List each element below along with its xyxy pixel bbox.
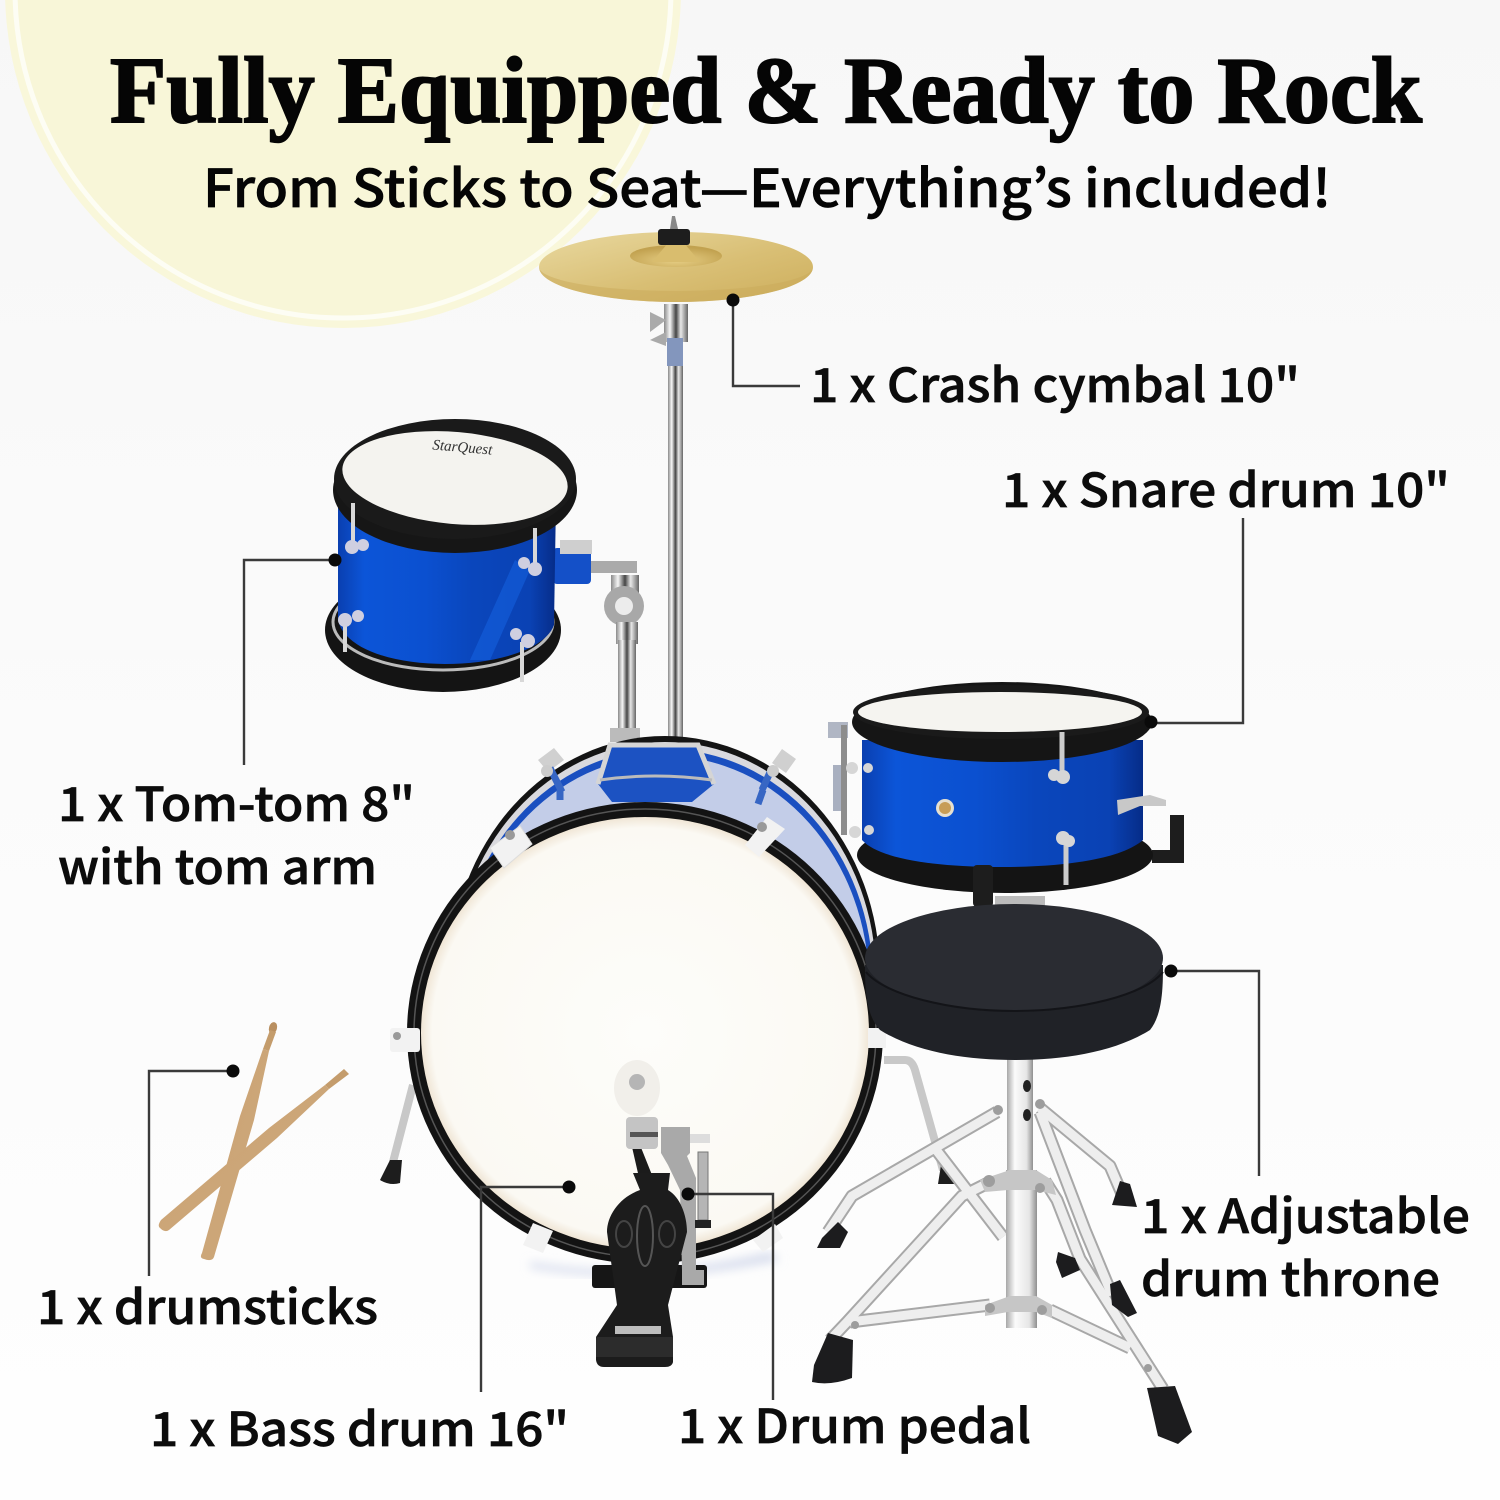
tom-tom (325, 419, 577, 692)
title: Fully Equipped & Ready to Rock (110, 39, 1423, 143)
callout: snare drum: 1 x Snare drum 10" (1002, 452, 1450, 521)
tom-tom: StarQuest (432, 437, 494, 459)
throne center post (851, 1058, 1152, 1372)
callout: drumsticks (37, 1064, 378, 1338)
callout: snare drum (1002, 452, 1450, 728)
tom arm (553, 540, 644, 742)
bass drum shell (450, 736, 880, 1214)
bass drum legs (380, 1060, 954, 1184)
crash cymbal (539, 216, 813, 302)
bass drum shadow (530, 1252, 780, 1276)
drumsticks (159, 1021, 349, 1260)
callout: drum throne: 1 x Adjustable (1141, 1178, 1470, 1247)
snare drum (828, 682, 1184, 907)
drum kit photo illustration (159, 216, 1192, 1444)
callout: bass drum: 1 x Bass drum 16" (150, 1391, 569, 1460)
callout: bass drum (150, 1180, 576, 1460)
drum pedal (592, 1060, 711, 1367)
throne legs (828, 1108, 1163, 1389)
callout: drumsticks: 1 x drumsticks (37, 1269, 378, 1338)
callout: tom-tom: 1 x Tom-tom 8" (58, 766, 415, 835)
cymbal stand (650, 304, 688, 752)
throne seat (865, 904, 1163, 1060)
callout: tom-tom (58, 554, 415, 898)
callout: drum throne: drum throne (1141, 1241, 1440, 1310)
throne feet (812, 1181, 1192, 1444)
callout: crash cymbal (726, 294, 1300, 416)
callout: drum pedal: 1 x Drum pedal (678, 1388, 1031, 1457)
callout: tom-tom: with tom arm (58, 829, 377, 898)
callout: drum throne (1141, 964, 1470, 1310)
bass drum head (390, 802, 886, 1264)
callout: drum pedal (678, 1188, 1031, 1457)
callout: crash cymbal: 1 x Crash cymbal 10" (810, 347, 1300, 416)
subtitle: From Sticks to Seat—Everything’s included! (203, 147, 1331, 222)
decorative yellow circle (5, 0, 681, 328)
